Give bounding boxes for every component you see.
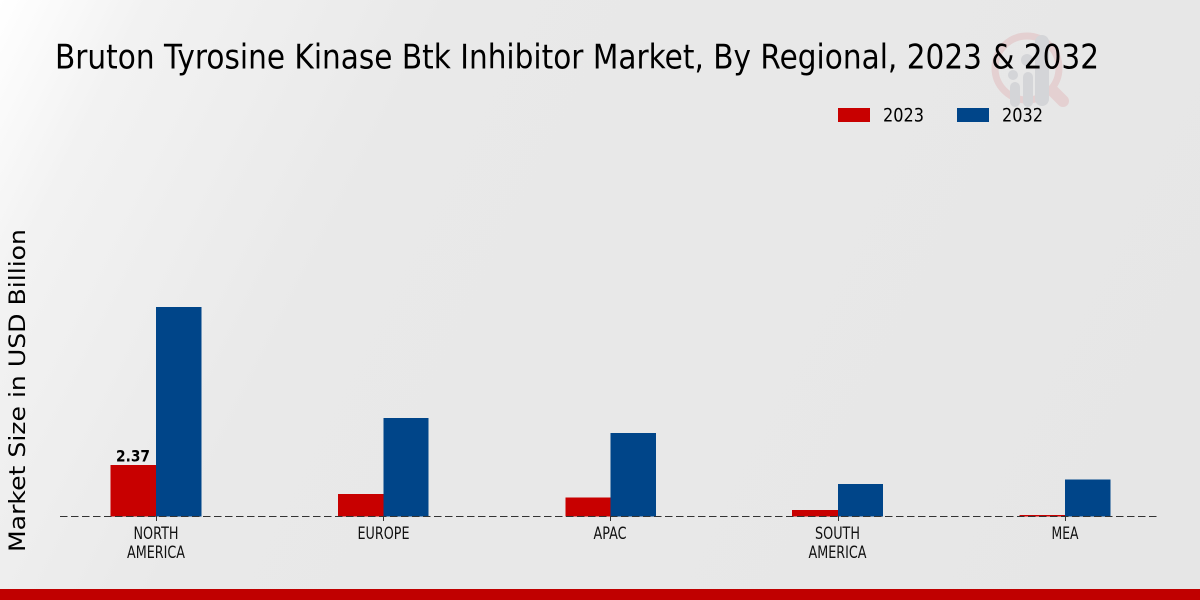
category label: North America: AMERICA	[127, 543, 186, 562]
bars: North America	[110, 307, 202, 516]
bars: MEA	[1020, 480, 1110, 516]
legend item: 2023: 2023	[883, 104, 924, 126]
category label: MEA: MEA	[1052, 524, 1079, 543]
category label: North America	[127, 524, 186, 562]
category label: APAC: APAC	[594, 524, 626, 543]
bars: South America	[792, 484, 883, 516]
category label: North America: NORTH	[134, 524, 178, 543]
category label: South America: AMERICA	[808, 543, 867, 562]
category label: South America	[808, 524, 867, 562]
legend	[838, 104, 1043, 126]
watermark logo icon	[995, 36, 1063, 102]
bars: Europe	[338, 418, 428, 516]
bar chart	[60, 307, 1160, 562]
y-axis title: Market Size in USD Billion	[5, 229, 31, 552]
legend item: 2023	[838, 104, 924, 126]
category label: South America: SOUTH	[815, 524, 860, 543]
legend item: 2032: 2032	[1002, 104, 1043, 126]
legend item: 2032	[957, 104, 1043, 126]
value label: 2.37	[116, 446, 150, 466]
bars: APAC	[566, 433, 656, 516]
footer bar	[0, 589, 1200, 600]
category label: Europe: EUROPE	[358, 524, 410, 543]
